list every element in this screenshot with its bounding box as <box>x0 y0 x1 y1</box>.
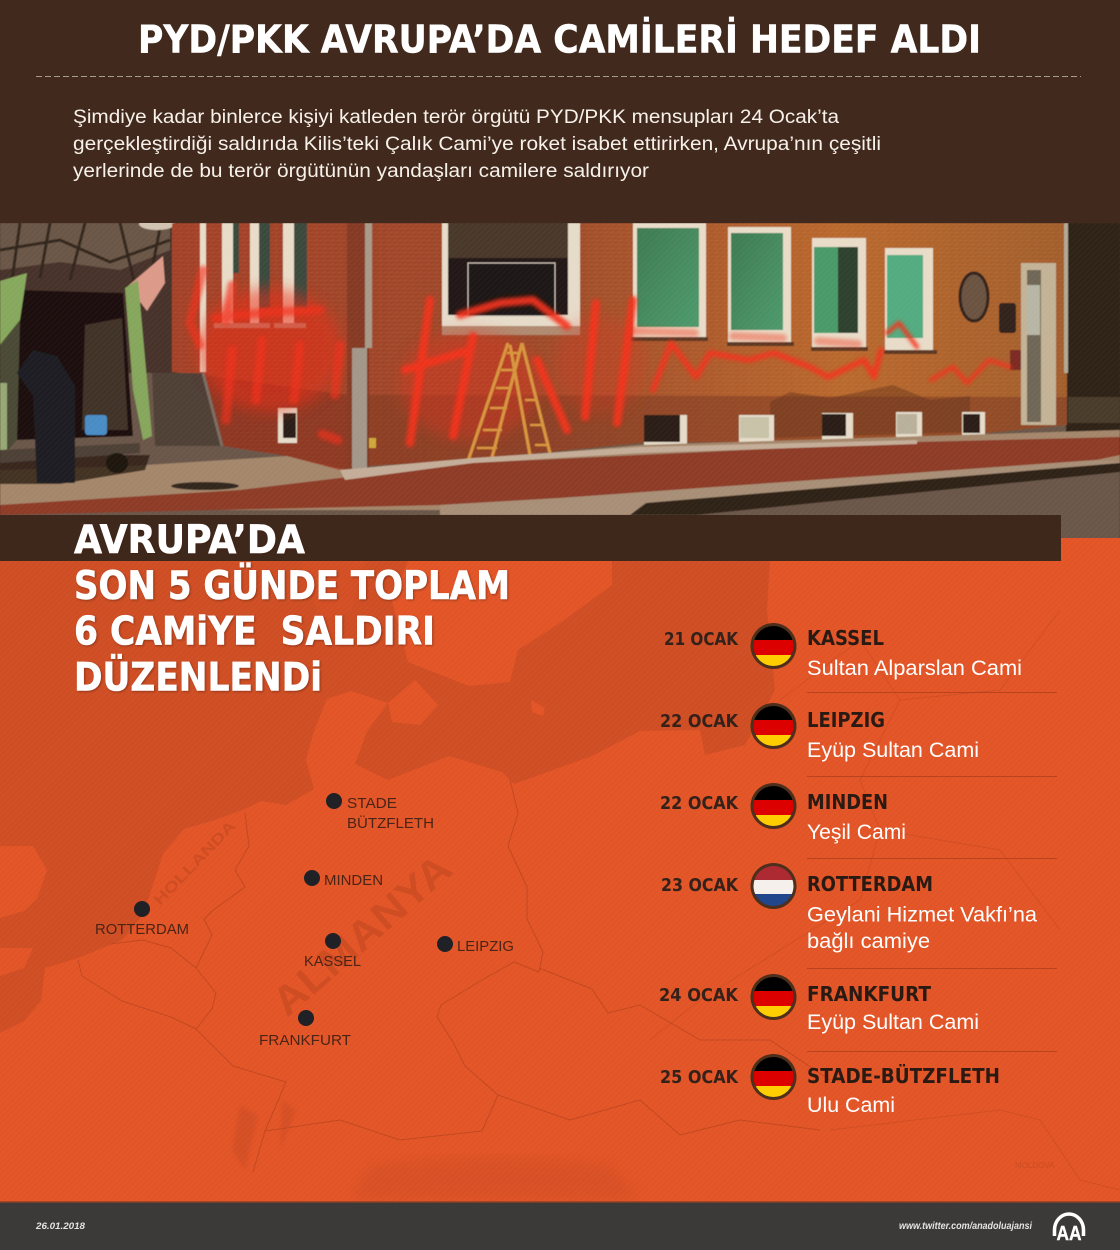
intro text: Şimdiye kadar binlerce kişiyi katleden terör örgütü PYD/PKK mensupları 24 Ocak’ta <box>73 107 839 128</box>
ground <box>0 430 1120 510</box>
entry: 21 Ocak Kassel <box>664 623 1022 680</box>
intro text: yerlerinde de bu terör örgütünün yandaşları camilere saldırıyor <box>73 161 650 182</box>
entry: 23 Ocak Rotterdam: bağlı camiye <box>807 930 930 953</box>
entry: 22 Ocak Minden: 22 OCAK <box>660 794 739 814</box>
entry: 22 Ocak Leipzig: Eyüp Sultan Cami <box>807 739 979 762</box>
satellite dishes <box>128 256 165 311</box>
map: mountain texture <box>350 1158 640 1200</box>
header panel <box>0 0 1120 223</box>
entry: 22 Ocak Minden: Yeşil Cami <box>807 821 906 844</box>
entry: 22 Ocak Leipzig <box>660 703 979 762</box>
marker: Kassel: KASSEL <box>304 953 361 970</box>
title: PYD/PKK AVRUPA’DA CAMİLERİ HEDEF ALDI <box>138 18 981 62</box>
icon: Anadolu Agency logo: AA <box>1056 1223 1082 1245</box>
entry: 25 Ocak Stade-Bützfleth: 25 OCAK <box>660 1068 739 1088</box>
graffiti <box>190 270 1010 443</box>
wall <box>172 223 1067 470</box>
label: Almanya: ALMANYA <box>264 846 460 1025</box>
far right trees <box>1066 223 1120 438</box>
trees <box>0 223 180 373</box>
label: Moldova: MOLDOVA <box>1015 1161 1055 1170</box>
heading: AVRUPA’DA <box>74 518 305 563</box>
green windows <box>631 223 937 354</box>
date: 26.01.2018 <box>35 1221 86 1232</box>
map: borders <box>78 610 1120 1190</box>
dark banner behind heading <box>0 515 1061 561</box>
marker: Minden <box>304 870 383 889</box>
marker: Leipzig: LEIPZIG <box>457 938 514 955</box>
entry: 24 Ocak Frankfurt <box>659 974 979 1034</box>
entry: 23 Ocak Rotterdam <box>661 863 1037 953</box>
entry: 25 Ocak Stade-Bützfleth: STADE-BÜTZFLETH <box>807 1064 1000 1088</box>
marker: Frankfurt: FRANKFURT <box>259 1032 351 1049</box>
stair railing <box>152 373 223 446</box>
entry: 25 Ocak Stade-Bützfleth <box>660 1054 1000 1117</box>
map: United Kingdom <box>0 846 47 918</box>
marker: Stade Bützfleth: BÜTZFLETH <box>347 814 434 832</box>
entry: 21 Ocak Kassel: 21 OCAK <box>664 630 739 650</box>
marker: Rotterdam: ROTTERDAM <box>95 921 189 938</box>
wall ornaments <box>960 273 988 321</box>
marker: Frankfurt <box>259 1010 351 1049</box>
entry: 23 Ocak Rotterdam: Geylani Hizmet Vakfı’na <box>807 904 1037 926</box>
heading: DÜZENLENDi <box>74 654 322 700</box>
marker: Kassel <box>304 933 361 970</box>
entry: 21 Ocak Kassel: Sultan Alparslan Cami <box>807 657 1022 680</box>
map panel <box>0 538 1120 1202</box>
attack list <box>659 623 1057 1117</box>
intro text <box>73 107 881 182</box>
entry: 25 Ocak Stade-Bützfleth: Ulu Cami <box>807 1094 895 1117</box>
entry: 21 Ocak Kassel: KASSEL <box>807 626 884 650</box>
photo: graffiti on the mosque wall <box>0 218 1120 540</box>
entry: 23 Ocak Rotterdam: ROTTERDAM <box>807 872 933 896</box>
map city markers <box>95 793 514 1049</box>
van <box>0 273 152 483</box>
corner shade and downpipe <box>347 223 369 469</box>
basement window left <box>278 408 297 443</box>
door <box>1021 263 1056 425</box>
marker: Minden: MINDEN <box>324 872 383 889</box>
heading: SON 5 GÜNDE TOPLAM <box>74 562 510 609</box>
left windows <box>200 223 294 372</box>
heading: 6 CAMiYE SALDIRI <box>74 610 435 654</box>
large central window <box>442 223 580 335</box>
entry: 22 Ocak Minden: MINDEN <box>807 790 888 814</box>
heading <box>74 518 510 700</box>
marker: Stade Bützfleth <box>326 793 434 832</box>
shadow under van <box>0 455 150 484</box>
entry: 24 Ocak Frankfurt: 24 OCAK <box>659 986 739 1006</box>
plinth shade <box>367 395 1067 466</box>
source url: www.twitter.com/anadoluajansi <box>899 1221 1032 1232</box>
entry: 24 Ocak Frankfurt: FRANKFURT <box>807 982 931 1006</box>
entry: 22 Ocak Minden <box>660 783 906 844</box>
map: Scandinavia <box>392 561 612 686</box>
ladder <box>468 343 552 465</box>
entry: 22 Ocak Leipzig: LEIPZIG <box>807 708 885 732</box>
footer <box>0 1201 1120 1250</box>
entry: 22 Ocak Leipzig: 22 OCAK <box>660 712 739 732</box>
marker: Leipzig <box>437 936 514 955</box>
entry: 23 Ocak Rotterdam: 23 OCAK <box>661 876 739 896</box>
country labels on map <box>151 818 1055 1170</box>
map: sea <box>0 561 775 1033</box>
label: Hollanda: HOLLANDA <box>151 818 239 909</box>
intro text: gerçekleştirdiği saldırıda Kilis’teki Çalık Cami’ye roket isabet ettirirken, Avrupa’nın çeşitli <box>73 134 881 155</box>
entry: 24 Ocak Frankfurt: Eyüp Sultan Cami <box>807 1011 979 1034</box>
basement windows <box>644 412 985 447</box>
icon: Anadolu Agency logo <box>1054 1214 1084 1245</box>
marker: Stade Bützfleth: STADE <box>347 795 397 812</box>
marker: Rotterdam <box>95 901 189 938</box>
